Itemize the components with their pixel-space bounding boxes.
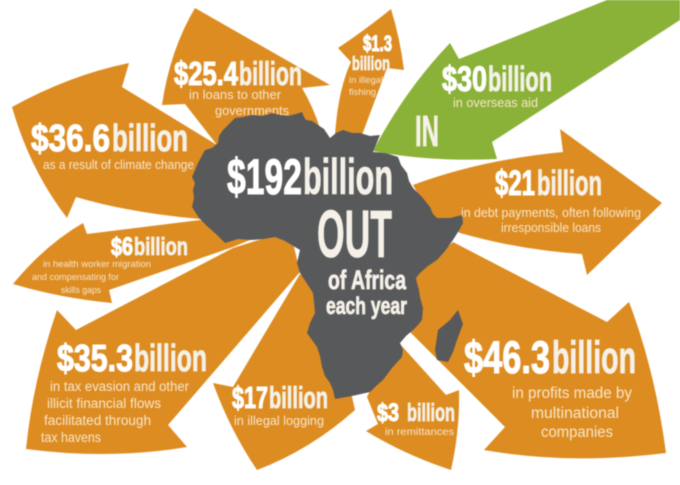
amount: $1.3 billion xyxy=(352,31,392,75)
amount: $36.6 billion: billion xyxy=(112,118,188,160)
caption: loans xyxy=(189,88,289,118)
headline: $192 billion: $192 xyxy=(227,149,302,205)
arrow: $35.3 billion tax evasion xyxy=(26,230,300,454)
amount: $35.3 billion: billion xyxy=(134,338,207,380)
amount: $3 billion xyxy=(377,399,455,427)
caption: health workers: skills gaps xyxy=(61,285,101,296)
caption: illegal fishing: fishing xyxy=(349,87,376,98)
caption: tax evasion xyxy=(41,379,189,445)
caption: climate change: as a result of climate change xyxy=(43,158,194,172)
amount: $25.4 billion: $25.4 xyxy=(174,55,238,92)
caption: debt payments: in debt payments, often following xyxy=(461,205,641,220)
amount: $1.3 billion: $1.3 xyxy=(363,31,392,56)
arrow: $30 billion overseas aid (in) xyxy=(373,0,680,160)
amount: $30 billion: $30 xyxy=(442,60,487,99)
amount: $30 billion: billion xyxy=(488,60,552,99)
caption: debt payments xyxy=(461,205,641,235)
headline: $192 billion: billion xyxy=(303,149,393,205)
amount: $35.3 billion: $35.3 xyxy=(57,338,133,380)
caption: illegal fishing xyxy=(349,75,383,98)
caption: loans: governments xyxy=(215,104,289,118)
amount: $1.3 billion: billion xyxy=(352,54,390,75)
amount: $3 billion: $3 xyxy=(377,399,399,427)
amount: $35.3 billion xyxy=(57,338,207,380)
caption: health workers: in health worker migration xyxy=(43,259,151,270)
arrow: $46.3 billion multinational profits xyxy=(410,242,666,458)
amount: $30 billion xyxy=(442,60,552,99)
caption: tax evasion: illicit financial flows xyxy=(47,396,161,411)
caption: multinational profits: multinational xyxy=(531,405,619,422)
caption: overseas aid: in overseas aid xyxy=(453,96,538,110)
amount: $6 billion xyxy=(111,233,188,261)
amount: $17 billion: billion xyxy=(269,380,328,415)
arrow: $6 billion health workers xyxy=(13,220,262,303)
amount: $21 billion xyxy=(495,164,602,203)
headline: of Africa each year xyxy=(326,265,407,320)
amount: $17 billion: $17 xyxy=(232,380,268,415)
amount: $46.3 billion xyxy=(464,332,636,383)
amount: $25.4 billion xyxy=(174,55,302,92)
amount: $21 billion: $21 xyxy=(495,164,535,203)
arrow: $25.4 billion loans xyxy=(162,8,330,170)
caption: tax evasion: facilitated through xyxy=(44,413,151,428)
amount: $36.6 billion: $36.6 xyxy=(31,118,110,160)
amount: $25.4 billion: billion xyxy=(239,55,302,92)
headline: $192 billion xyxy=(227,149,393,205)
map: Madagascar xyxy=(435,310,463,362)
caption: illegal fishing: in illegal xyxy=(349,75,383,86)
map: Africa xyxy=(192,112,463,399)
caption: illegal logging: in illegal logging xyxy=(234,414,324,428)
caption: health workers: and compensating for xyxy=(32,272,119,283)
arrow: $21 billion debt payments xyxy=(413,129,662,275)
amount: $6 billion: billion xyxy=(134,233,188,261)
amount: $17 billion xyxy=(232,380,328,415)
amount: $3 billion: billion xyxy=(407,399,455,427)
amount: $36.6 billion xyxy=(31,118,188,160)
arrow: $36.6 billion climate change xyxy=(12,63,240,219)
arrow: $3 billion remittances xyxy=(366,344,459,470)
amount: $6 billion: $6 xyxy=(111,233,133,261)
amount: $46.3 billion: $46.3 xyxy=(464,332,550,383)
caption: multinational profits: in profits made by xyxy=(512,385,632,402)
label: IN: IN xyxy=(415,107,439,156)
caption: debt payments: irresponsible loans xyxy=(501,220,601,235)
caption: health workers xyxy=(32,259,151,296)
caption: tax evasion: in tax evasion and other xyxy=(50,379,189,394)
headline: of Africa each year: of Africa xyxy=(328,265,407,295)
headline: of Africa each year: each year xyxy=(326,293,407,320)
caption: tax evasion: tax havens xyxy=(41,430,101,445)
caption: remittances: in remittances xyxy=(385,427,454,438)
amount: $21 billion: billion xyxy=(537,164,602,203)
caption: multinational profits xyxy=(512,385,632,441)
arrow: $1.3 billion illegal fishing xyxy=(335,9,404,135)
caption: loans: in loans to other xyxy=(189,88,281,102)
caption: multinational profits: companies xyxy=(541,424,613,441)
arrow: $17 billion illegal logging xyxy=(213,274,355,470)
headline: OUT: OUT xyxy=(317,197,392,272)
